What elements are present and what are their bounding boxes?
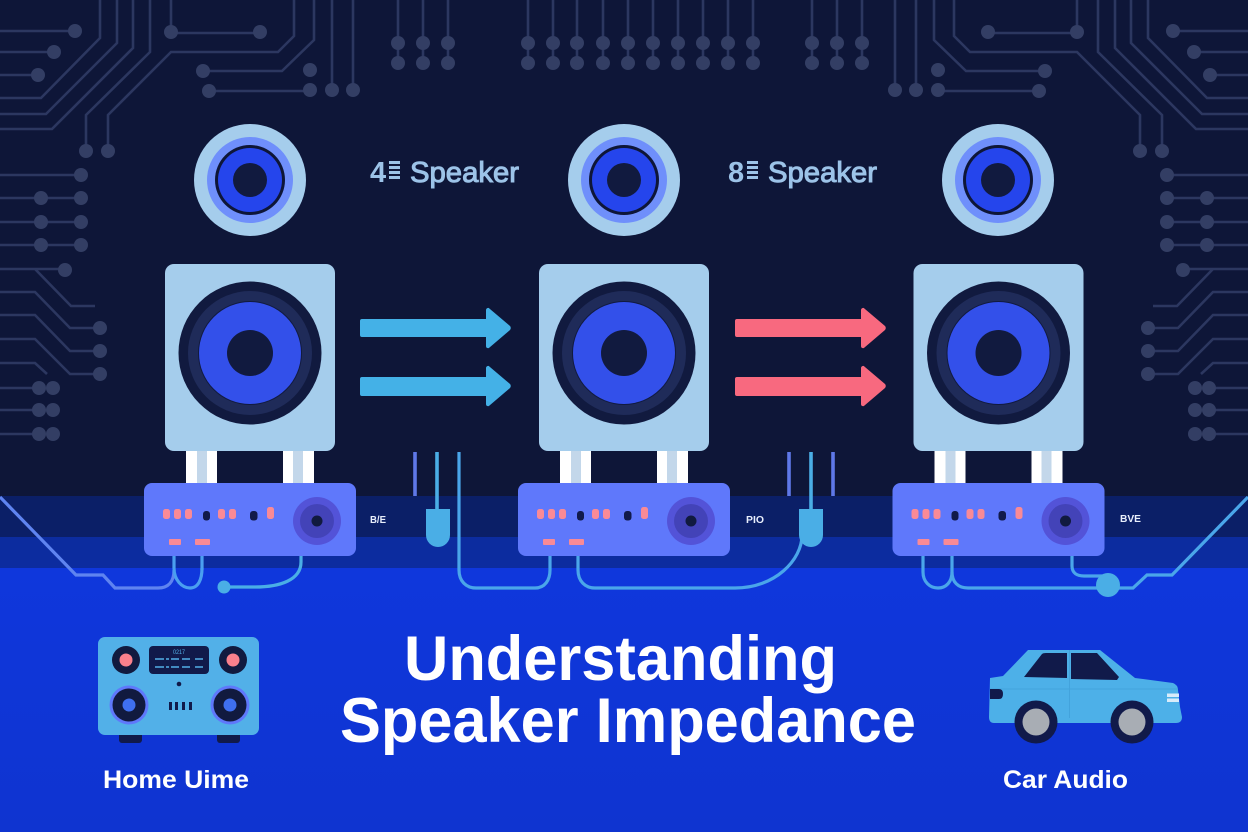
amplifier 1: [144, 483, 356, 556]
probe 2: [799, 509, 823, 547]
arrow: blue upper: [360, 308, 511, 348]
caption: car: Car Audio: [1003, 766, 1128, 794]
tweeter 3: [942, 124, 1054, 236]
title: Understanding: [404, 624, 837, 694]
amplifier 2: [518, 483, 730, 556]
icon: car: [989, 650, 1182, 744]
speaker cabinet 3: [914, 264, 1084, 485]
wires: [0, 452, 1248, 588]
amplifier 3: [892, 483, 1104, 556]
amp label 1: B/E: [370, 515, 386, 526]
label: 8 ohm speaker: Speaker: [768, 157, 877, 189]
title: Speaker Impedance: [340, 686, 916, 756]
junction dot: right: [1096, 573, 1120, 597]
icon: home stereo: 0217: [173, 650, 186, 656]
caption: home: Home Uime: [103, 766, 249, 794]
speaker cabinet 2: [539, 264, 709, 485]
tweeter 2: [568, 124, 680, 236]
circuit traces: right side: [888, 0, 1248, 441]
probe 1: [426, 509, 450, 547]
arrow: red upper: [735, 308, 886, 348]
speaker cabinet 1: [165, 264, 335, 485]
amp label 3: BVE: [1120, 514, 1141, 525]
label: 4 ohm speaker: 4: [370, 157, 386, 189]
amp label 2: PIO: [746, 515, 764, 526]
circuit traces: left side: [0, 0, 360, 441]
title: [340, 624, 916, 756]
arrow: red lower: [735, 366, 886, 406]
circuit traces: top centre pins: [391, 0, 869, 70]
junction dot: left: [218, 580, 230, 594]
tweeter 1: [194, 124, 306, 236]
arrow: blue lower: [360, 366, 511, 406]
label: 4 ohm speaker: Speaker: [410, 157, 519, 189]
label: 8 ohm speaker: 8: [728, 157, 744, 189]
icon: home stereo: [98, 637, 259, 743]
